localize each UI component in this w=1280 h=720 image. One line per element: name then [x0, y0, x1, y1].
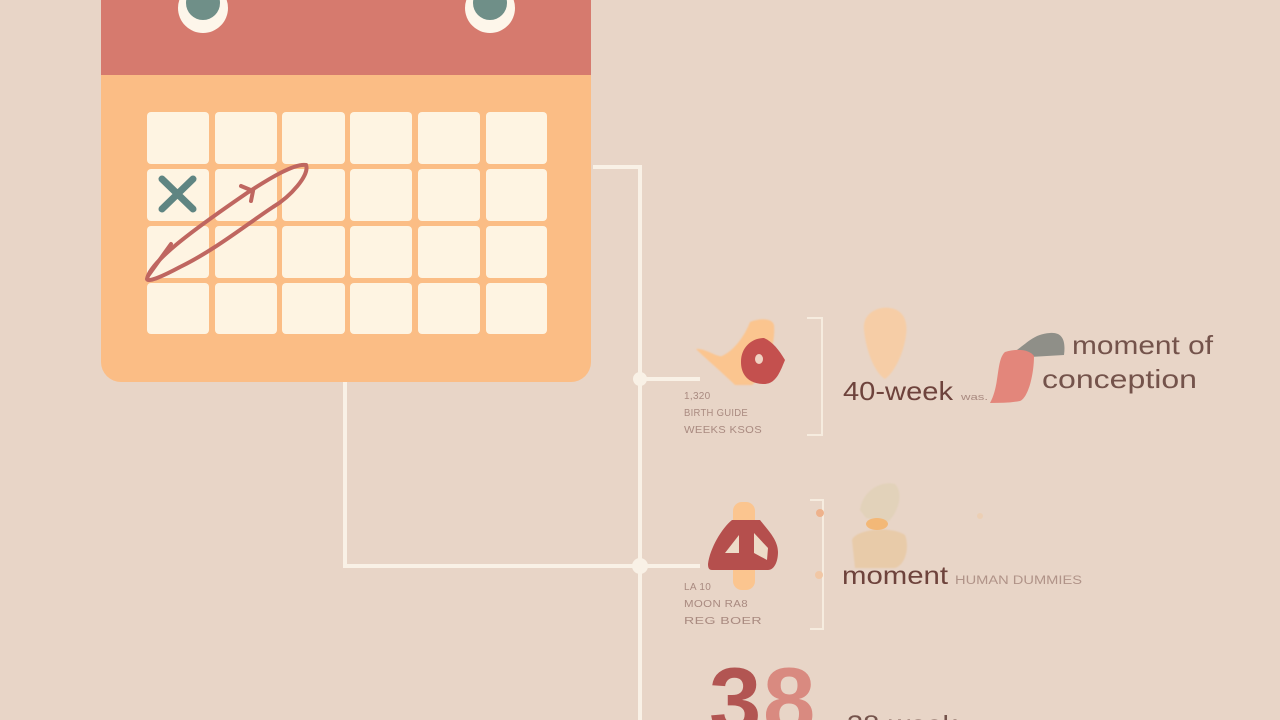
- calendar header: [101, 0, 591, 75]
- milestone: 38 weeks: [709, 648, 958, 720]
- text: moment of conception: [1042, 330, 1214, 394]
- calendar: [101, 0, 591, 382]
- calendar day grid: [147, 112, 547, 334]
- icon: left binder ring: [178, 0, 228, 33]
- small label block: WEEKS KSOS: [684, 425, 762, 436]
- calendar body: [101, 70, 591, 382]
- icon: right binder ring: [465, 0, 515, 33]
- icon: orange and red figure: [696, 319, 785, 385]
- small label block: [684, 391, 762, 436]
- bracket: [810, 500, 823, 629]
- timeline connector lines: [345, 167, 700, 720]
- bracket: [807, 318, 822, 435]
- small note: was.: [960, 392, 988, 402]
- milestone: 40 weeks: [684, 308, 1214, 436]
- text: moment of conception: conception: [1042, 364, 1197, 394]
- small label block: BIRTH GUIDE: [684, 408, 748, 419]
- icon: X mark: [162, 179, 193, 209]
- small label block: MOON RA8: [684, 599, 748, 610]
- icon: numeral 4: [708, 502, 778, 590]
- text: moment of conception: moment of: [1072, 330, 1214, 360]
- small label block: REG BOER: [684, 616, 762, 627]
- heading: moment: moment: [842, 562, 948, 590]
- icon: peach drop: [864, 308, 906, 379]
- heading: 40-week: 40-week: [843, 376, 954, 406]
- small label block: LA 10: [684, 582, 711, 593]
- icon: faded figure: [815, 483, 983, 579]
- small label block: [684, 582, 762, 627]
- icon: red and grey shape: [990, 333, 1064, 403]
- icon: red circled date range: [147, 165, 307, 280]
- small caption: HUMAN DUMMIES: [955, 575, 1082, 587]
- milestone: 40 numeral: [684, 483, 1082, 629]
- small label block: 1,320: [684, 391, 711, 402]
